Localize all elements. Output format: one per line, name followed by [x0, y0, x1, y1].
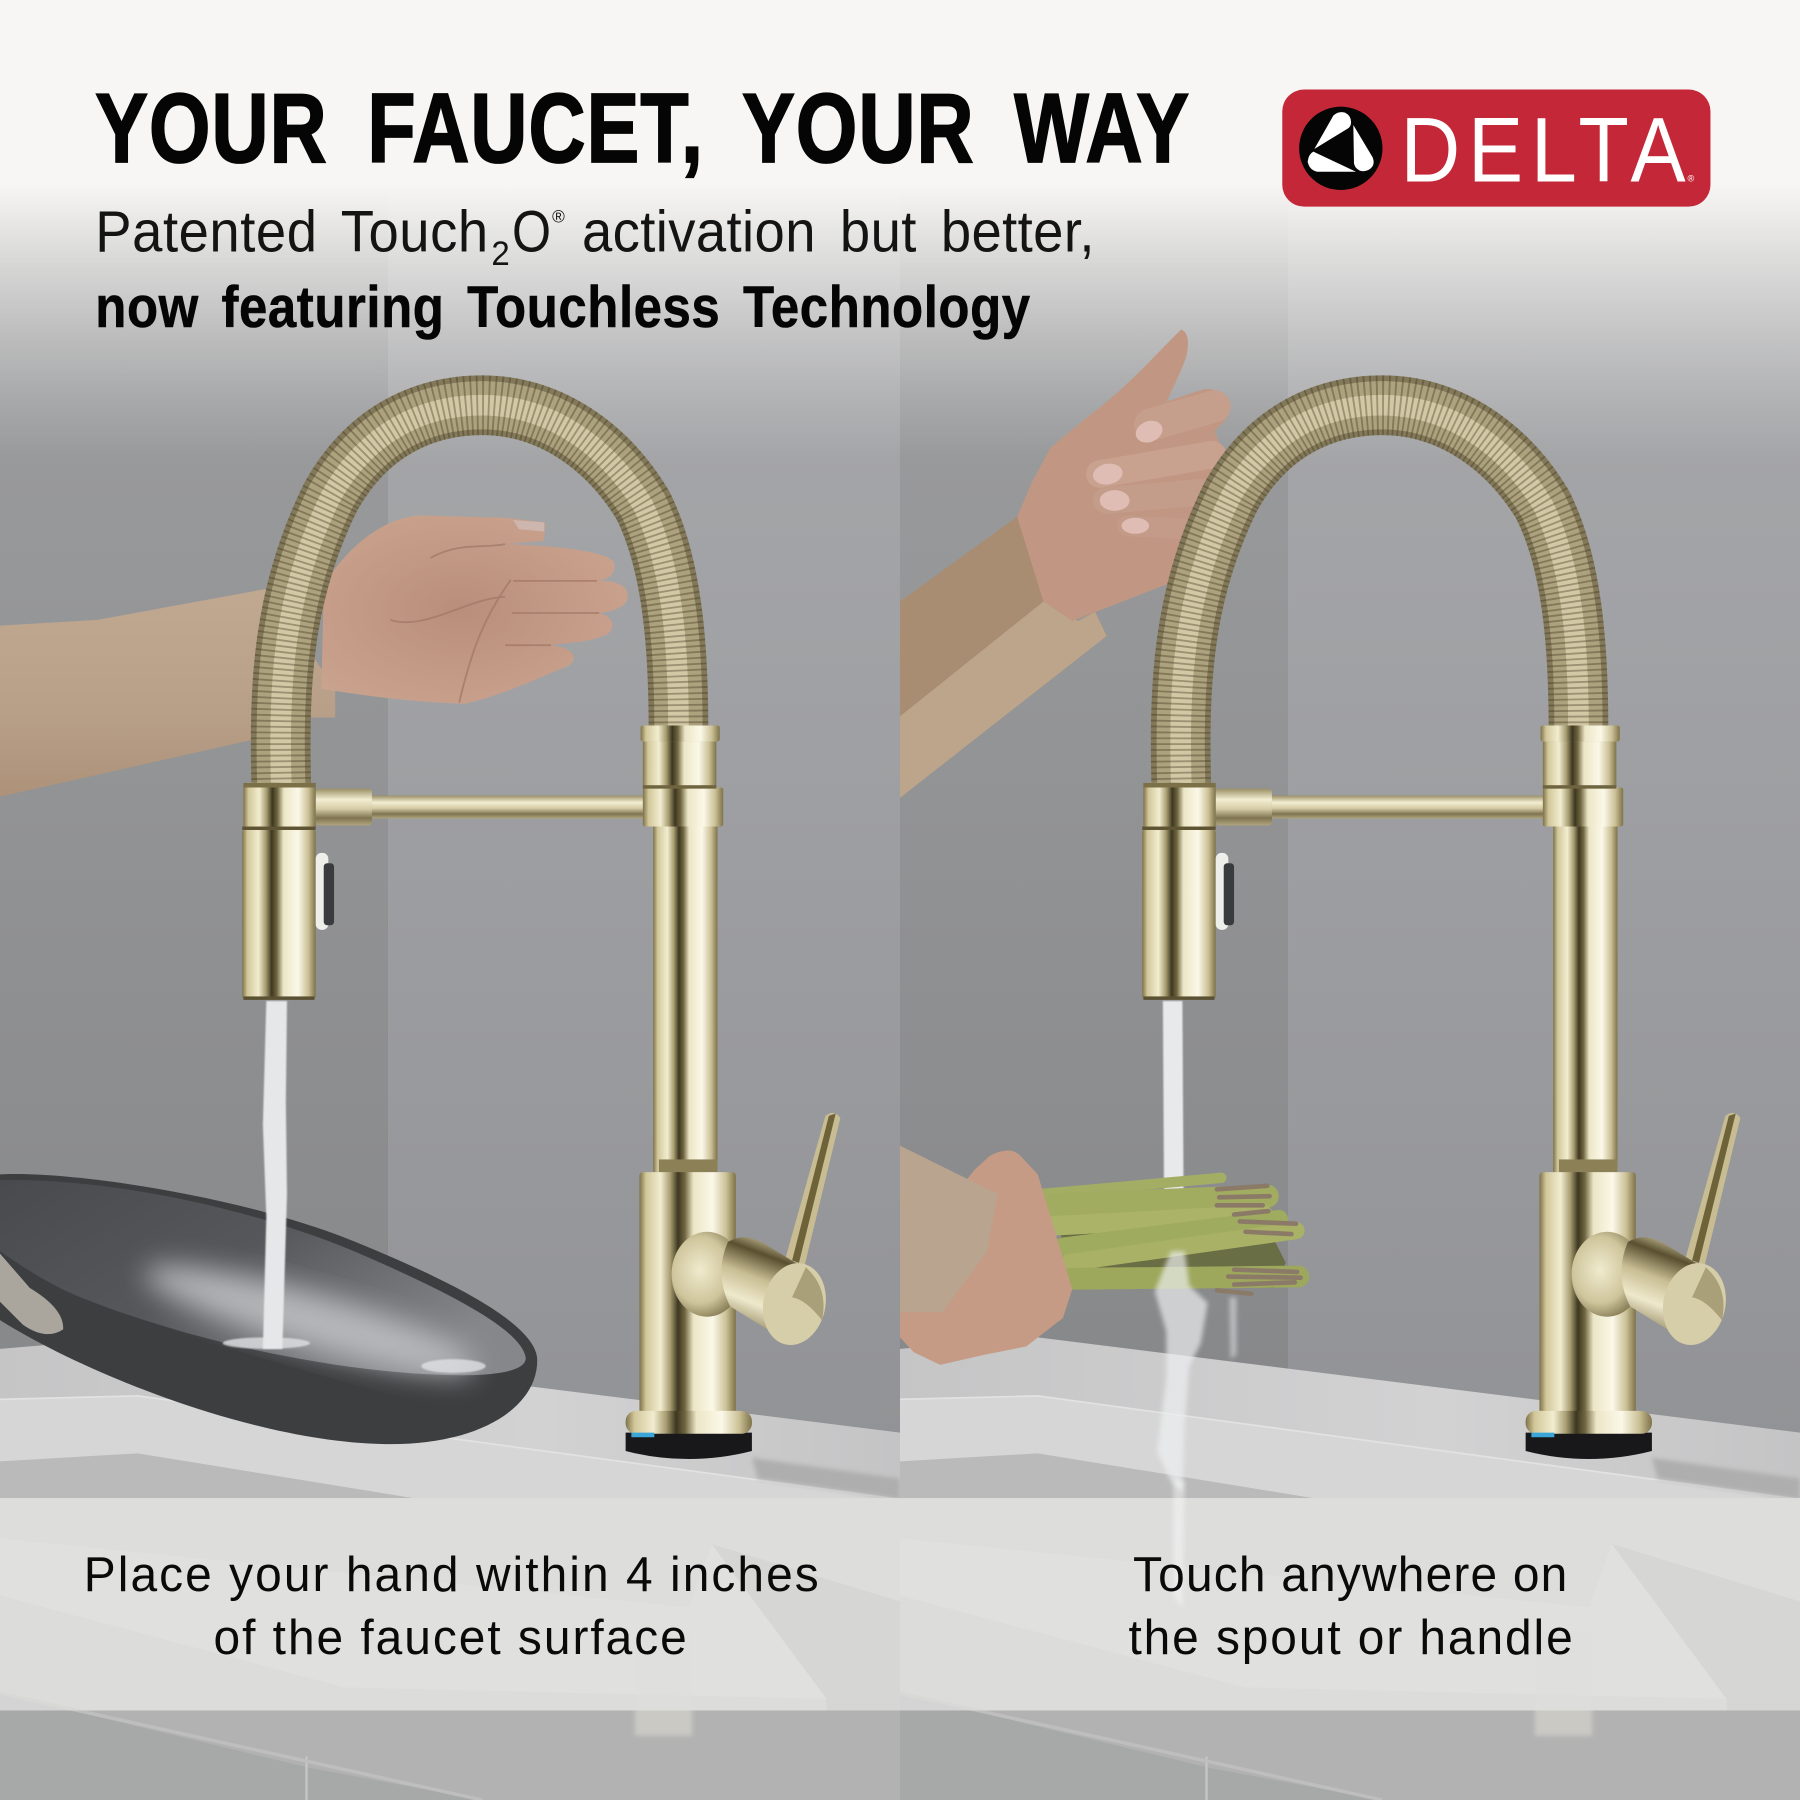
hand: left open palm: [321, 515, 628, 704]
hand: right curled fingers: [1100, 406, 1215, 530]
sleeve: left arm: [0, 589, 335, 797]
subtitle text end: activation but better,: [582, 199, 1094, 264]
caption: right: [1128, 1547, 1573, 1665]
water fading through caption: [1173, 1481, 1185, 1607]
pan bubbling water: [223, 1337, 486, 1373]
subtitle text start: Patented Touch: [95, 199, 488, 264]
subscript 2: 2: [491, 235, 510, 273]
caption left line 1: Place your hand within 4 inches: [84, 1547, 819, 1602]
faucet: left: [242, 405, 840, 1459]
hand: lower: [900, 1151, 1072, 1365]
pan body: [0, 1174, 537, 1444]
hand: right finger nails: [1091, 417, 1166, 534]
logo red badge: [1282, 90, 1710, 207]
pan interior: [0, 1180, 526, 1375]
caption right line 2: the spout or handle: [1128, 1611, 1573, 1665]
title: YOUR FAUCET, YOUR WAY: [95, 72, 1189, 183]
caption: left: [84, 1547, 819, 1665]
water splash: right lower: [1155, 1251, 1236, 1492]
thumb nail: [513, 520, 544, 532]
logo: Delta: [1282, 90, 1710, 207]
panel: right scene wall and counter: [900, 0, 1800, 1800]
sleeve: lower: [900, 1146, 998, 1312]
logo wordmark: DELTA: [1401, 98, 1686, 201]
sleeve: right lower fold: [900, 602, 1107, 798]
registered mark: ®: [552, 207, 565, 227]
hand: palm creases and finger lines: [390, 544, 599, 703]
water stream: left: [263, 1001, 287, 1349]
photo: right arm with hand touching spout: [900, 329, 1230, 798]
faucet: right: [1142, 405, 1740, 1459]
subtitle line 1: [95, 199, 1094, 273]
caption band: right: [900, 1498, 1800, 1710]
pan handle: [0, 1254, 63, 1334]
caption right line 1: Touch anywhere on: [1133, 1547, 1567, 1602]
sleeve: right upper arm: [900, 517, 1107, 798]
logo white triangle blades: [1308, 112, 1374, 172]
logo black circle: [1299, 107, 1382, 190]
hand: right palm and thumb: [1017, 329, 1230, 621]
water stream: right upper: [1163, 1001, 1184, 1194]
photo: left arm with hand near faucet: [0, 515, 628, 797]
asparagus bundle: [1042, 1178, 1301, 1294]
caption band: left: [0, 1498, 900, 1710]
letter O: O: [512, 199, 551, 264]
photo: pan under running water: [0, 1174, 537, 1444]
top fade background: [0, 0, 1800, 459]
panel: left scene wall and counter: [0, 0, 900, 1800]
hand and sleeve holding asparagus: [900, 1146, 1072, 1365]
pan highlight: [137, 1246, 483, 1394]
logo registered mark: ®: [1688, 173, 1695, 183]
caption left line 2: of the faucet surface: [214, 1611, 687, 1665]
subtitle line 2: now featuring Touchless Technology: [95, 274, 1031, 340]
